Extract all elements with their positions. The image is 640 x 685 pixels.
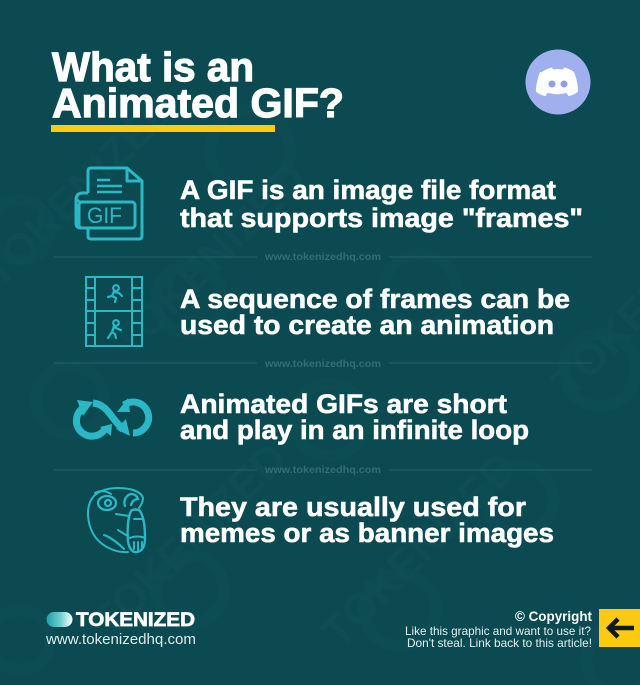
- copyright notice: Don't steal. Link back to this article!: [407, 636, 592, 650]
- text: short and looping: [180, 389, 529, 445]
- text: TOKENIZED: [312, 443, 526, 657]
- copyright notice: [405, 609, 592, 650]
- text: TOKENIZED: [102, 153, 316, 367]
- title: Animated GIF?: [52, 80, 344, 126]
- website url: www.tokenizedhq.com: [45, 631, 196, 648]
- icon: film strip with runners: [86, 277, 142, 346]
- title underline: [51, 125, 275, 132]
- icon: GIF file: [76, 168, 142, 239]
- text: sequence of frames: [180, 284, 570, 340]
- text: short and looping: Animated GIFs are short: [180, 389, 507, 419]
- text: TOKENIZED: [82, 433, 296, 647]
- icon: GIF file: GIF: [87, 203, 122, 228]
- title: What is an: [52, 44, 254, 90]
- icon: infinite loop arrows: [76, 398, 149, 436]
- divider 2: www.tokenizedhq.com: [264, 359, 381, 370]
- text: memes or banners: [180, 492, 554, 548]
- divider 1: www.tokenizedhq.com: [264, 252, 381, 263]
- text: GIF definition: A GIF is an image file format: [180, 175, 556, 205]
- text: memes or banners: memes or as banner images: [180, 518, 554, 548]
- divider 3: www.tokenizedhq.com: [264, 465, 381, 476]
- text: memes or banners: They are usually used for: [180, 492, 526, 522]
- copyright notice: Like this graphic and want to use it?: [405, 624, 591, 638]
- arrow button: [599, 609, 640, 647]
- icon: discord logo: [526, 50, 590, 114]
- copyright notice: © Copyright: [515, 609, 592, 624]
- text: sequence of frames: used to create an animation: [180, 310, 554, 340]
- logo: Tokenized: TOKENIZED: [76, 609, 195, 631]
- logo: Tokenized: [45, 609, 196, 648]
- title: [52, 44, 344, 126]
- text: GIF definition: [180, 175, 583, 233]
- icon: meme face: [88, 488, 145, 552]
- text: sequence of frames: A sequence of frames can be: [180, 284, 570, 314]
- text: GIF definition: that supports image "frames": [180, 203, 583, 233]
- text: short and looping: and play in an infinite loop: [180, 415, 529, 445]
